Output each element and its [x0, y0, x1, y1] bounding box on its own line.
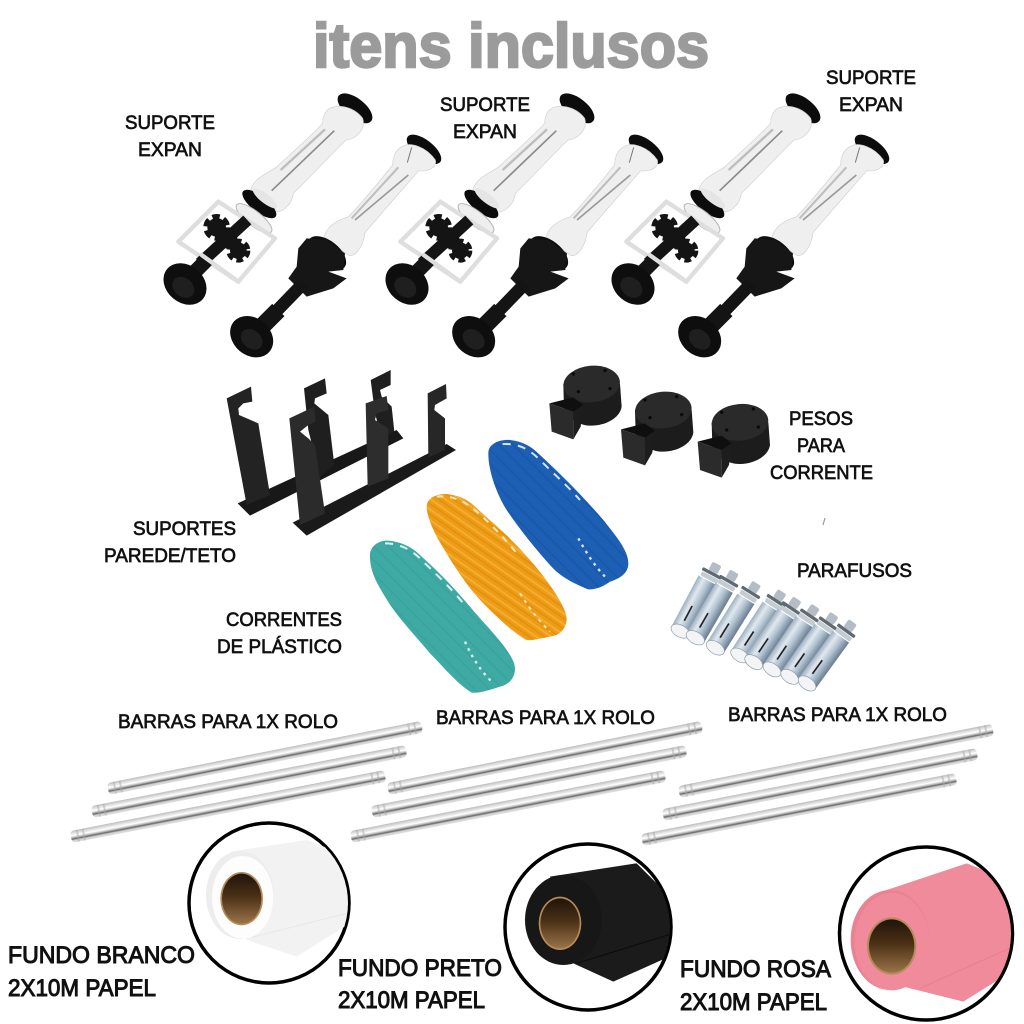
label: pesos para corrente: CORRENTE	[770, 462, 873, 484]
expansion bracket set 2	[377, 88, 668, 366]
bars set 1	[70, 721, 423, 843]
bars set 3	[641, 724, 994, 846]
label: suportes parede/teto: PAREDE/TETO	[104, 545, 236, 567]
label: barras set 1: BARRAS PARA 1X ROLO	[118, 711, 338, 733]
label: parafusos: PARAFUSOS	[797, 560, 912, 582]
label: fundo rosa	[680, 956, 832, 1016]
plastic chains	[370, 440, 628, 693]
expansion bracket set 3	[603, 88, 894, 366]
weight 2	[621, 389, 693, 465]
label: fundo branco: FUNDO BRANCO	[8, 942, 195, 969]
label: suporte expan 1: SUPORTE	[125, 112, 215, 134]
label: fundo preto: 2X10M PAPEL	[338, 987, 485, 1014]
expansion bolts	[669, 559, 861, 695]
label: pesos para corrente: PARA	[797, 435, 845, 457]
orange chain	[427, 494, 567, 640]
label: pesos para corrente	[770, 408, 873, 484]
white roll circle	[189, 823, 350, 983]
label: suporte expan 1: EXPAN	[138, 139, 202, 161]
label: pesos para corrente: PESOS	[789, 408, 853, 430]
label: correntes de plastico: CORRENTES	[226, 609, 342, 631]
label: suporte expan 3	[826, 67, 916, 116]
pink roll circle	[840, 847, 1017, 1020]
label: fundo preto	[338, 955, 502, 1014]
bars set 2	[350, 721, 703, 843]
label: suportes parede/teto	[104, 518, 236, 567]
label: barras set 3: BARRAS PARA 1X ROLO	[728, 704, 947, 726]
weight 1	[549, 363, 622, 439]
label: suporte expan 3: SUPORTE	[826, 67, 916, 89]
black roll circle	[505, 844, 677, 1010]
weight 3	[698, 402, 770, 478]
small speck	[823, 518, 825, 525]
label: suporte expan 2: EXPAN	[453, 121, 517, 143]
label: suportes parede/teto: SUPORTES	[133, 518, 236, 540]
expansion bracket set 1	[155, 88, 446, 366]
label: suporte expan 3: EXPAN	[839, 94, 903, 116]
label: barras set 2: BARRAS PARA 1X ROLO	[436, 707, 655, 729]
label: fundo rosa: 2X10M PAPEL	[680, 989, 827, 1016]
chain weights	[549, 363, 770, 478]
label: fundo branco: 2X10M PAPEL	[8, 975, 156, 1002]
teal chain	[370, 541, 515, 693]
label: correntes de plastico: DE PLÁSTICO	[217, 635, 342, 658]
blue chain	[488, 440, 628, 589]
label: suporte expan 1	[125, 112, 215, 161]
wall and ceiling hangers	[227, 370, 456, 536]
label: suporte expan 2: SUPORTE	[440, 94, 530, 116]
label: fundo preto: FUNDO PRETO	[338, 955, 502, 982]
label: correntes de plastico	[217, 609, 342, 658]
label: suporte expan 2	[440, 94, 530, 143]
label: fundo branco	[8, 942, 195, 1002]
label: fundo rosa: FUNDO ROSA	[680, 956, 832, 983]
title: itens inclusos	[313, 12, 709, 81]
